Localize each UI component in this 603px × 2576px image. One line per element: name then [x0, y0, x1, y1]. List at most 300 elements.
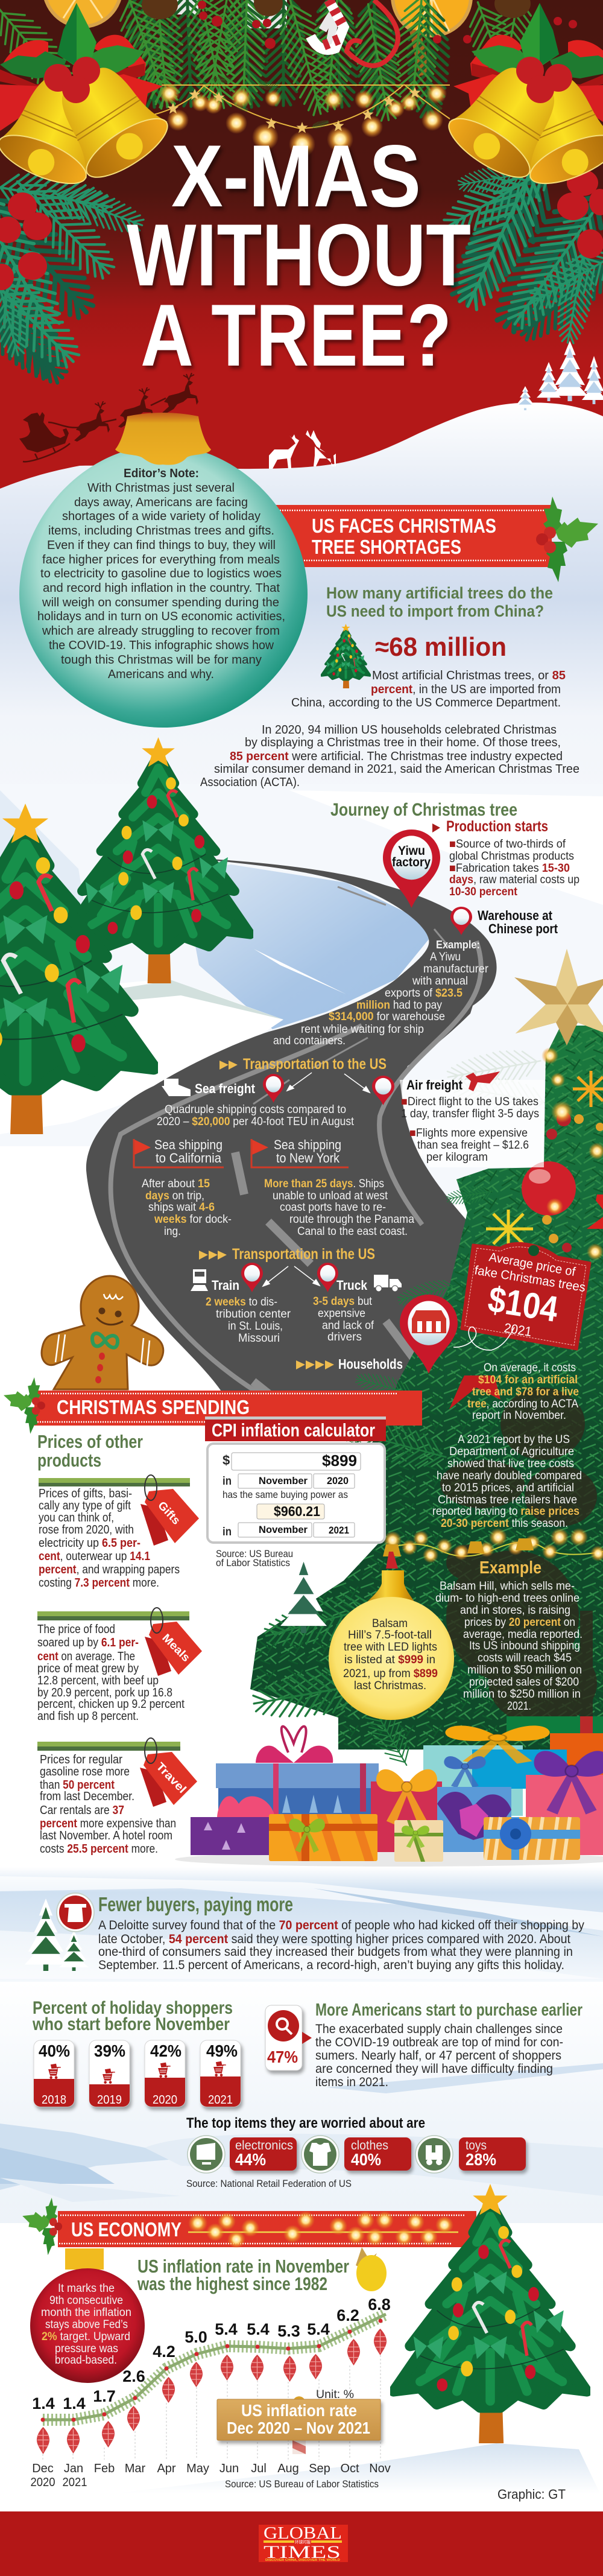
- pin: Yiwu factory: Yiwu: [398, 844, 425, 858]
- reindeer pair: [269, 430, 336, 469]
- signpost: US inflation rate: Dec 2020 – Nov 2021: [227, 2419, 370, 2437]
- panel: CPI inflation calculator: [205, 1416, 386, 1569]
- travel text: costs 25.5 percent more.: [40, 1842, 158, 1856]
- text block: USDA report: to 2015 prices, and artificial: [442, 1482, 574, 1494]
- form card: in: [223, 1526, 232, 1538]
- ornaments: [37, 2329, 387, 2454]
- chart: percent cards by year: [34, 2040, 241, 2107]
- text block: households: 85 percent were artificial. The Christmas tree industry expected: [230, 750, 563, 763]
- pine cones and berries: [142, 0, 577, 49]
- section: production starts: Production starts: [446, 818, 548, 835]
- text block: California: days on trip,: [145, 1190, 204, 1202]
- card: 2021: 2021: [208, 2093, 233, 2107]
- ornament: gold bell and ball: [356, 2247, 387, 2291]
- month labels: Jan: [64, 2462, 83, 2475]
- question heading: How many artificial trees do the: [326, 584, 553, 602]
- faded branches behind the air freight text: [445, 1045, 550, 1119]
- panel: gifts: [39, 1475, 199, 1590]
- travel text: Car rentals are 37: [40, 1804, 124, 1817]
- lights: [188, 2211, 458, 2248]
- month labels: Feb: [94, 2462, 115, 2475]
- item: clothes: [302, 2136, 411, 2173]
- text block: New York: [264, 1178, 414, 1238]
- yellow ornament: Balsam Hill price: [329, 1552, 454, 1720]
- meals text: The price of food: [37, 1623, 115, 1636]
- text block: New York: Canal to the east coast.: [297, 1225, 408, 1238]
- logo: Global Times: [259, 2524, 348, 2562]
- flag: sea shipping to California: Sea shipping: [154, 1137, 223, 1152]
- gift boxes: [175, 1716, 603, 1867]
- travel text: from last December.: [40, 1790, 134, 1803]
- text block: households: In 2020, 94 million US households celebrated Christmas: [262, 723, 557, 737]
- logo: Global Times: 环球时报: [295, 2539, 311, 2545]
- heading: percent of holiday shoppers: who start before November: [32, 2014, 230, 2034]
- heading: inflation rate: was the highest since 1982: [137, 2273, 327, 2294]
- body text: A Deloitte survey found that of the 70 percent of people who had kicked off their shopping by: [98, 1918, 584, 1932]
- text block: New York: More than 25 days. Ships: [264, 1178, 384, 1190]
- card: 2019: 2019: [97, 2093, 122, 2107]
- header: CPI inflation calculator: [212, 1420, 375, 1441]
- bullets: [449, 838, 579, 898]
- month labels: Apr: [157, 2462, 176, 2475]
- ornament: red callout: stays above Fed’s: [45, 2318, 128, 2331]
- text block: Balsam Hill example: dium- to high-end trees online: [435, 1592, 579, 1605]
- heading: percent of holiday shoppers: [32, 1998, 233, 2034]
- text block: Balsam Hill example: [435, 1558, 582, 1713]
- road: [86, 857, 500, 1400]
- form card: $899: [322, 1451, 357, 1470]
- body text: one-third of consumers said they increased their budgets from what they were planning in: [98, 1945, 573, 1959]
- item: toys: toys: [466, 2139, 487, 2152]
- source: Source: US Bureau: [216, 1548, 293, 1559]
- garland line: [43, 2314, 386, 2420]
- snowy trees top right: [516, 341, 603, 410]
- editor's note text: which are already struggling to recover from: [42, 624, 280, 638]
- gifts text: [39, 1487, 180, 1590]
- text block: supply chain: items in 2021.: [315, 2075, 388, 2089]
- tag: travel: Travel: [153, 1760, 189, 1796]
- question heading: [326, 584, 553, 620]
- ornament: red callout: 9th consecutive: [49, 2294, 123, 2307]
- editor's note text: items, including Christmas trees and gifts.: [48, 524, 274, 538]
- panel: editor's note ornament: [19, 413, 308, 728]
- editor's note text: and record high inflation in the country. That: [43, 582, 280, 595]
- footer band: [0, 2511, 603, 2576]
- text block: Balsam Hill example: million to $250 million in: [463, 1688, 581, 1701]
- heading: transportation in the US: Transportation in the US: [232, 1246, 375, 1263]
- text block: USDA report: A 2021 report by the US: [458, 1433, 570, 1446]
- tag: meals: Meals: [159, 1632, 192, 1664]
- bullets: 10-30 percent: [449, 886, 518, 898]
- ornament: red callout: month the inflation: [41, 2306, 131, 2319]
- item: toys: 28%: [466, 2150, 496, 2169]
- bells left: [0, 3, 177, 194]
- text block: Yiwu example on road: and containers.: [273, 1035, 346, 1047]
- values: 6.8: [368, 2295, 391, 2314]
- icon: ship and sea freight label: [162, 1079, 256, 1096]
- title: A TREE?: [140, 286, 452, 384]
- heading: prices of other products: products: [37, 1450, 101, 1471]
- text block: Balsam Hill example: 2021.: [507, 1700, 531, 1713]
- text block: average cost: report in November.: [472, 1409, 566, 1422]
- bullets: days, raw material costs up: [449, 874, 579, 886]
- panel: meals: [37, 1608, 202, 1723]
- text block: Balsam Hill example: prices by 20 percent on: [464, 1616, 575, 1629]
- travel text: gasoline rose more: [40, 1765, 130, 1778]
- snowy trees: [25, 1899, 89, 1971]
- side fir branches: [0, 147, 603, 393]
- yellow ornament: Balsam Hill price: last Christmas.: [354, 1680, 426, 1692]
- air freight label and plane icon: [406, 1071, 500, 1093]
- month labels: [30, 2462, 391, 2489]
- meals text: by 20.9 percent, pork up 16.8: [37, 1686, 172, 1699]
- card: 2018: 2018: [42, 2093, 66, 2107]
- gifts text: cent, outerwear up 14.1: [39, 1550, 150, 1563]
- pin: households with house icon: [400, 1295, 458, 1374]
- gifts text: you can think of,: [39, 1511, 114, 1524]
- heading: Fewer buyers, paying more: [98, 1893, 293, 1915]
- white panel: air freight: ■Direct flight to the US takes: [401, 1096, 538, 1108]
- text block: Yiwu example on road: Example:: [436, 939, 480, 951]
- text block: average cost: [467, 1362, 579, 1422]
- tree illustration: left: [0, 804, 154, 1134]
- values: 5.3: [277, 2322, 300, 2340]
- beige box: [394, 1820, 443, 1862]
- light string: right tree: [383, 1528, 603, 1563]
- text block: quadruple shipping costs: Quadruple shipping costs compared to: [165, 1103, 346, 1116]
- section: production starts: [432, 818, 579, 898]
- bells right: [440, 3, 603, 194]
- text block: train: in St. Louis,: [228, 1320, 283, 1333]
- card: 2019: [89, 2040, 130, 2107]
- text block: imports: Most artificial Christmas trees, or 85: [372, 669, 566, 682]
- source: NRF: Source: National Retail Federation of US: [186, 2178, 352, 2189]
- tag: gifts: Gifts: [155, 1499, 183, 1528]
- text block: average cost: tree, according to ACTA: [467, 1398, 578, 1410]
- text block: quadruple shipping costs: 2020 – $20,000 per 40-foot TEU in August: [157, 1115, 355, 1128]
- ornament: red callout: It marks the: [58, 2282, 115, 2295]
- white panel: air freight: ■Flights more expensive: [409, 1127, 528, 1140]
- train: Train: [212, 1278, 239, 1293]
- pin: warehouse at Chinese port: Chinese port: [488, 921, 558, 936]
- price tag: average price of fake trees: 2021: [503, 1320, 533, 1339]
- text block: households: similar consumer demand in 2021, said the American Christmas Tree: [214, 763, 579, 776]
- icon: holly: [22, 2198, 62, 2255]
- pin: warehouse at Chinese port: [450, 907, 558, 936]
- statistic: 68 million: ≈68 million: [375, 632, 507, 662]
- heading: transportation in the US: [199, 1246, 375, 1263]
- text block: USDA report: showed that live tree costs: [447, 1458, 574, 1470]
- pine branches: [0, 0, 539, 124]
- text block: USDA report: 20-30 percent this season.: [441, 1517, 568, 1530]
- card: 2020: [145, 2040, 185, 2107]
- text block: Yiwu example on road: $314,000 for warehouse: [329, 1010, 445, 1023]
- gingerbread man: [42, 1276, 163, 1389]
- tag: gifts: [140, 1475, 199, 1546]
- month labels: Mar: [125, 2462, 146, 2475]
- month labels: Jun: [219, 2462, 239, 2475]
- icon: ship and sea freight label: Sea freight: [195, 1081, 256, 1096]
- gifts text: cally any type of gift: [39, 1499, 131, 1512]
- banner: US faces Christmas tree shortages: TREE SHORTAGES: [312, 536, 461, 558]
- question heading: US need to import from China?: [326, 602, 544, 620]
- pin: sea freight: [263, 1074, 284, 1103]
- text block: average cost: $104 for an artificial: [478, 1374, 578, 1386]
- form card: 2021: [329, 1524, 349, 1536]
- month labels: Sep: [309, 2462, 330, 2475]
- month labels: 2020: [30, 2476, 55, 2489]
- editor's note text: Even if they can find things to buy, they will: [47, 539, 276, 552]
- body text: September. 11.5 percent of Americans, a record-high, aren’t buying any gifts this holiday.: [98, 1958, 564, 1972]
- text block: New York: route through the Panama: [289, 1213, 414, 1226]
- values: 5.4: [307, 2320, 330, 2338]
- values: 1.7: [93, 2387, 116, 2405]
- price tag: average price of fake trees: [461, 1243, 590, 1350]
- bullets: ■Source of two-thirds of: [449, 838, 566, 851]
- air freight label and plane icon: Air freight: [406, 1077, 463, 1093]
- card: 2021: [200, 2040, 241, 2107]
- text block: Balsam Hill example: projected sales of $200: [469, 1676, 579, 1689]
- text block: Balsam Hill example: average, media reported.: [463, 1628, 582, 1641]
- back right boxes: [423, 1716, 603, 1855]
- form card: $960.21: [274, 1503, 320, 1519]
- pin: warehouse at Chinese port: Warehouse at: [478, 908, 553, 923]
- meals text: [37, 1623, 185, 1723]
- text block: truck: 3-5 days but: [313, 1295, 373, 1308]
- households label: [296, 1356, 403, 1372]
- panel: travel: [37, 1738, 197, 1856]
- gifts text: costing 7.3 percent more.: [39, 1576, 159, 1590]
- heading: transportation to the US: Transportation to the US: [243, 1056, 387, 1073]
- text block: train: tribution center: [216, 1308, 291, 1321]
- text block: USDA report: have nearly doubled compared: [437, 1470, 582, 1482]
- red ball: [522, 1161, 576, 1216]
- values: 5.4: [247, 2320, 270, 2338]
- signpost: US inflation rate: US inflation rate: [241, 2401, 357, 2420]
- tree illustration: middle: [66, 737, 250, 983]
- ornament: red callout: pressure was: [55, 2343, 118, 2355]
- banner: US economy: US ECONOMY: [71, 2218, 182, 2241]
- gifts text: Prices of gifts, basi-: [39, 1487, 132, 1500]
- month labels: May: [186, 2462, 209, 2475]
- arrow: from pin to price tag: [453, 1327, 514, 1350]
- meals text: percent, chicken up 9.2 percent: [37, 1698, 185, 1711]
- values: 5.0: [185, 2328, 207, 2346]
- text block: Balsam Hill example: Its US inbound shipping: [469, 1640, 580, 1652]
- text block: California: ships wait 4-6: [148, 1201, 215, 1214]
- editor's note text: Americans and why.: [108, 668, 214, 681]
- heading: inflation rate: US inflation rate in November: [137, 2256, 349, 2277]
- red bow: [449, 1375, 500, 1409]
- text block: Balsam Hill example: Example: [479, 1558, 541, 1578]
- text block: USDA report: Christmas tree retailers have: [438, 1494, 577, 1506]
- tag: meals: [145, 1608, 202, 1676]
- heading: inflation rate: [137, 2256, 349, 2294]
- journey heading: Journey of Christmas tree: [330, 800, 517, 820]
- flag: sea shipping to California: [133, 1137, 224, 1167]
- meals text: 12.8 percent, with beef up: [37, 1674, 159, 1687]
- text block: imports: [291, 669, 566, 709]
- gold star: [514, 949, 603, 1045]
- item: electronics: 44%: [235, 2150, 266, 2169]
- flag: sea shipping to California: to California: [156, 1150, 222, 1166]
- dashed guides: [43, 2355, 380, 2460]
- yellow ornament: Balsam Hill price: Balsam: [372, 1617, 408, 1630]
- flag: sea shipping to New York: Sea shipping: [274, 1137, 341, 1152]
- banner: US economy: [22, 2198, 476, 2255]
- values: [32, 2295, 391, 2413]
- editor's note text: Editor’s Note:: [124, 467, 199, 480]
- source: of Labor Statistics: [216, 1557, 290, 1569]
- form card: $: [223, 1453, 230, 1468]
- chart: inflation garland: [30, 2295, 391, 2489]
- ornament: red callout: [30, 2248, 145, 2383]
- price tag: average price of fake trees: $104: [485, 1279, 561, 1330]
- text block: New York: coast ports have to re-: [280, 1201, 386, 1214]
- editor's note text: days away, Americans are facing: [74, 496, 248, 509]
- form card: 2020: [327, 1475, 349, 1486]
- text block: USDA report: reported having to raise prices: [432, 1505, 579, 1518]
- small snowy tree: [280, 1552, 327, 1633]
- pin: train: [241, 1263, 263, 1292]
- body text: late October, 54 percent said they were spotting higher prices compared with 2020. About: [98, 1932, 570, 1946]
- heading: prices of other products: Prices of other: [37, 1431, 143, 1452]
- pin: truck: [317, 1263, 338, 1292]
- text block: supply chain: sumers. Nearly half, or 47 percent of shoppers: [315, 2049, 561, 2063]
- logo: Global Times: GLOBAL: [264, 2524, 342, 2543]
- month labels: Dec: [32, 2462, 54, 2475]
- callout: 47 percent: 47%: [267, 2048, 298, 2066]
- text block: Yiwu example on road: A Yiwu: [430, 951, 461, 963]
- icon: holly: [4, 1377, 45, 1434]
- travel text: last November. A hotel room: [40, 1829, 172, 1842]
- editor's note text: face higher prices for everything from meals: [42, 553, 280, 566]
- gifts text: percent, and wrapping papers: [39, 1563, 180, 1576]
- item: clothes: clothes: [351, 2139, 388, 2152]
- values: 1.4: [63, 2394, 86, 2413]
- white panel: air freight: 1 day, transfer flight 3-5 days: [401, 1108, 539, 1120]
- meals text: price of meat grew by: [37, 1662, 139, 1675]
- yellow ornament: Balsam Hill price: tree with LED lights: [344, 1641, 437, 1654]
- truck: [336, 1275, 402, 1293]
- red box with orange bow: [371, 1769, 442, 1852]
- tag: travel: [140, 1738, 197, 1807]
- unit label: Unit: %: [316, 2388, 354, 2401]
- text block: Balsam Hill example: Balsam Hill, which sells me-: [440, 1580, 575, 1593]
- text block: Balsam Hill example: costs will reach $45: [478, 1652, 572, 1664]
- orange striped box: [269, 1814, 377, 1861]
- text block: California: ing.: [164, 1225, 181, 1238]
- editor's note text: the COVID-19. This infographic shows how: [49, 639, 274, 652]
- source: BLS: Source: US Bureau of Labor Statistics: [225, 2478, 379, 2490]
- editor's note text: holidays and in turn on US economic activities,: [37, 610, 285, 623]
- snowflake: [486, 1210, 533, 1248]
- santa sleigh silhouette: [19, 373, 198, 462]
- banner: Christmas spending: [4, 1377, 422, 1434]
- text block: California: [142, 1178, 232, 1238]
- orange slices: [44, 0, 471, 75]
- item: toys: [415, 2136, 526, 2173]
- card: 2018: 40%: [39, 2041, 70, 2060]
- purple star box: [191, 1796, 275, 1855]
- text block: Yiwu example on road: with annual: [412, 975, 468, 988]
- values: 1.4: [32, 2394, 55, 2413]
- top garland with bells, lights and holly: [0, 0, 603, 393]
- month labels: 2021: [63, 2476, 87, 2489]
- ornament: red callout: 2% target. Upward: [42, 2330, 130, 2343]
- travel text: percent more expensive than: [40, 1817, 176, 1830]
- text block: households: by displaying a Christmas tree in their home. Of those trees,: [245, 736, 561, 749]
- card: 2021: 49%: [206, 2041, 238, 2060]
- text block: California: weeks for dock-: [154, 1213, 232, 1226]
- text block: imports: percent, in the US are imported from: [371, 683, 561, 696]
- month labels: Nov: [369, 2462, 391, 2475]
- values: 5.4: [215, 2320, 238, 2338]
- pin: air freight: [372, 1076, 394, 1105]
- gifts text: electricity up 6.5 per-: [39, 1537, 140, 1550]
- text block: quadruple shipping costs: [157, 1103, 355, 1128]
- text block: USDA report: [432, 1433, 582, 1530]
- text block: Yiwu example on road: [273, 939, 489, 1047]
- candy cane and ribbon: [311, 0, 398, 66]
- text block: average cost: tree and $78 for a live: [472, 1386, 579, 1398]
- logo: Global Times: TIMES: [264, 2542, 341, 2562]
- text block: train: [206, 1296, 291, 1345]
- banner: Christmas spending: CHRISTMAS SPENDING: [57, 1396, 250, 1418]
- card: 2019: 39%: [94, 2041, 125, 2060]
- title: X-MAS: [171, 127, 421, 225]
- card: 2020: 42%: [150, 2041, 182, 2060]
- editor's note text: [37, 467, 285, 681]
- text block: households: [200, 723, 579, 789]
- meals text: soared up by 6.1 per-: [37, 1636, 139, 1649]
- meals text: cent on average. The: [37, 1650, 135, 1663]
- text block: supply chain: the COVID-19 outbreak are top of mind for con-: [315, 2035, 563, 2049]
- arrows from transportation heading: [287, 1073, 370, 1093]
- text block: imports: China, according to the US Commerce Department.: [291, 696, 561, 709]
- pin: Yiwu factory: factory: [392, 855, 431, 869]
- side red berries: [0, 170, 603, 290]
- form card: [207, 1444, 385, 1543]
- icon: holly: [536, 496, 598, 582]
- body text: [98, 1918, 584, 1972]
- white wrappers: [173, 0, 287, 28]
- floor shadow: [175, 1852, 603, 1867]
- text block: train: Missouri: [238, 1332, 280, 1345]
- white panel: air freight: [400, 1080, 544, 1167]
- flag: sea shipping to New York: to New York: [276, 1150, 340, 1166]
- text block: Yiwu example on road: exports of $23.5: [385, 987, 463, 1000]
- travel text: than 50 percent: [40, 1778, 115, 1792]
- pin: Yiwu factory: [383, 830, 440, 908]
- text block: Yiwu example on road: manufacturer: [423, 963, 489, 976]
- decoration: right fir tree and gold star: [250, 949, 603, 1772]
- text block: Balsam Hill example: and in stores, is raising: [460, 1604, 570, 1617]
- source: [216, 1548, 293, 1569]
- text block: California: After about 15: [142, 1178, 210, 1190]
- text block: New York: unable to unload at west: [273, 1190, 388, 1202]
- yellow ornament: Balsam Hill price: is listed at $999 in: [344, 1654, 435, 1666]
- text block: supply chain: are concerned they will have difficulty finding: [315, 2062, 553, 2076]
- month labels: Jul: [251, 2462, 267, 2475]
- white panel: air freight: than sea freight – $12.6: [417, 1139, 529, 1152]
- dots and hooks: [41, 2319, 382, 2422]
- icon: small christmas tree: [321, 624, 370, 688]
- christmas tree bottom right: [394, 2184, 587, 2443]
- big blue box: [216, 1727, 379, 1822]
- ornament ball: [19, 445, 308, 728]
- light string: [154, 76, 450, 157]
